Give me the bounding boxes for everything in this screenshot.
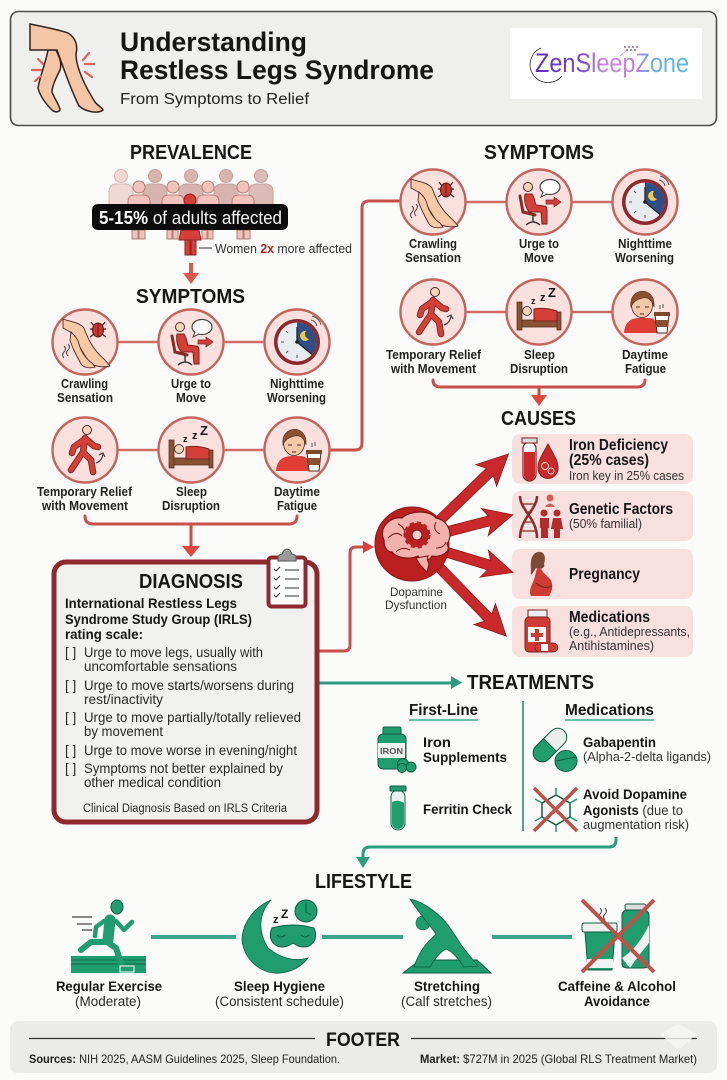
icon: pregnant woman	[530, 552, 552, 596]
icon: sleep disruption: Z	[200, 423, 208, 438]
label: urge to move	[171, 377, 211, 405]
label: crawling sensation	[57, 377, 113, 405]
icon: crawling sensation	[52, 310, 118, 374]
header panel	[10, 12, 716, 126]
label: daytime fatigue	[274, 485, 320, 513]
label: daytime fatigue: Daytime	[622, 348, 668, 362]
note: clinical diagnosis: Clinical Diagnosis Based on IRLS Criteria	[83, 803, 288, 815]
label: sleep disruption: Sleep	[524, 348, 555, 362]
label: temporary relief: with Movement	[41, 499, 129, 513]
label: crawling sensation: Sensation	[405, 251, 461, 265]
card: medications: Medications	[569, 609, 650, 626]
subtitle: From Symptoms to Relief	[120, 91, 310, 108]
label: stretching	[401, 978, 492, 1009]
icon: stretching	[403, 899, 491, 973]
heading: causes: CAUSES	[501, 408, 576, 430]
icon: urge to move	[158, 310, 224, 374]
heading: symptoms: SYMPTOMS	[484, 142, 594, 164]
label: sleep hygiene: (Consistent schedule)	[215, 994, 344, 1009]
label: dopamine dysfunction	[385, 585, 447, 612]
label: caffeine and alcohol avoidance	[558, 978, 676, 1009]
text: ferritin check: Ferritin Check	[423, 801, 512, 817]
icon: nighttime worsening	[264, 310, 330, 374]
label: crawling sensation: Crawling	[409, 237, 457, 251]
icon: crawling sensation	[400, 170, 466, 234]
connector: diagnosis to dopamine	[319, 541, 374, 651]
text: iron supplements: Supplements	[423, 749, 507, 765]
text: avoid dopamine agonists: Avoid Dopamine	[583, 786, 687, 802]
heading: lifestyle: LIFESTYLE	[315, 871, 412, 893]
label: sleep disruption: Sleep	[176, 485, 207, 499]
label: temporary relief: with Movement	[390, 362, 477, 376]
icon: gabapentin capsule	[529, 724, 577, 772]
icon: sleep disruption: z	[183, 434, 188, 444]
label: regular exercise	[56, 978, 162, 1009]
icon: daytime fatigue	[264, 418, 330, 482]
panel: diagnosis	[54, 549, 317, 822]
card: medications	[512, 606, 693, 657]
card: pregnancy: Pregnancy	[569, 566, 640, 583]
logo	[510, 28, 702, 99]
icon: sleep hygiene moon	[242, 900, 317, 973]
heading: treatments: TREATMENTS	[467, 672, 594, 694]
label: nighttime worsening: Nighttime	[618, 237, 672, 251]
card: iron deficiency: Iron key in 25% cases	[569, 469, 684, 483]
label: urge to move: Urge to	[171, 377, 211, 391]
icon: daytime fatigue	[612, 280, 678, 344]
label: temporary relief	[37, 485, 133, 513]
icon: sleep disruption	[158, 418, 224, 482]
women callout: Women 2x more affected	[215, 242, 352, 256]
label: dopamine dysfunction: Dopamine	[390, 585, 443, 599]
icon: brain dopamine	[375, 507, 450, 581]
section: symptoms right	[386, 142, 678, 406]
label: crawling sensation: Sensation	[57, 391, 113, 405]
text: gabapentin	[583, 734, 711, 764]
label: temporary relief: Temporary Relief	[386, 348, 482, 362]
text: IRLS intro	[65, 595, 252, 642]
label: daytime fatigue: Fatigue	[625, 362, 666, 376]
panel: footer	[10, 1021, 717, 1073]
logo: ZenSleepZone	[535, 48, 689, 78]
icon: sleep hygiene moon: z	[273, 914, 279, 926]
label: regular exercise: (Moderate)	[75, 994, 141, 1009]
icon: bottle and pill	[525, 610, 558, 652]
label: caffeine and alcohol avoidance: Caffeine & Alcohol	[558, 978, 676, 994]
label: caffeine and alcohol avoidance: Avoidance	[584, 993, 650, 1009]
checklist: [ ]	[65, 743, 76, 758]
connector: treatments to lifestyle	[356, 837, 616, 868]
icon: runner	[71, 900, 146, 973]
label: nighttime worsening: Worsening	[615, 251, 674, 265]
bracket arrow: to causes	[433, 380, 645, 406]
text: sources: Sources: NIH 2025, AASM Guidelines 2025, Sleep Foundation.	[29, 1052, 340, 1066]
connector: diagnosis to treatments	[319, 676, 462, 689]
text: avoid dopamine agonists	[583, 786, 689, 832]
checklist: other medical condition	[84, 775, 221, 790]
checklist: uncomfortable sensations	[84, 659, 237, 674]
section: prevalence	[92, 142, 352, 284]
card: medications: Antihistamines)	[569, 639, 654, 653]
title	[120, 27, 434, 85]
label: sleep hygiene: Sleep Hygiene	[234, 978, 325, 994]
card: iron deficiency: (25% cases)	[569, 452, 649, 469]
checklist: [ ]	[65, 645, 76, 660]
checklist	[65, 645, 301, 790]
label: sleep hygiene	[215, 978, 344, 1009]
icon: test tube and drop	[522, 438, 558, 481]
text: iron supplements	[423, 734, 507, 765]
checklist: Urge to move legs, usually with	[84, 645, 263, 660]
label: temporary relief: Temporary Relief	[37, 485, 133, 499]
card: genetic factors: Genetic Factors	[569, 501, 673, 518]
icon: iron bottle: IRON	[380, 746, 403, 756]
bracket arrow: to diagnosis	[85, 516, 297, 557]
label: crawling sensation: Crawling	[61, 377, 108, 391]
title: Restless Legs Syndrome	[120, 55, 434, 85]
checklist: by movement	[84, 724, 163, 739]
text: IRLS intro: International Restless Legs	[65, 595, 237, 611]
icon: sleep disruption: z	[192, 430, 198, 442]
card: medications: (e.g., Antidepressants,	[569, 625, 690, 639]
stat pill: 5-15% of adults affected	[99, 208, 282, 228]
icon: sleep disruption	[506, 280, 572, 344]
checklist: rest/inactivity	[84, 692, 163, 707]
checklist: Urge to move partially/totally relieved	[84, 710, 301, 725]
connector: left symptoms to right symptoms	[330, 201, 400, 450]
label: urge to move: Move	[176, 391, 206, 405]
text: avoid dopamine agonists: Agonists (due to	[583, 802, 683, 818]
icon: sleep disruption: z	[540, 292, 546, 304]
text: market: Market: $727M in 2025 (Global RLS Treatment Market)	[420, 1052, 697, 1066]
label: daytime fatigue: Fatigue	[277, 499, 317, 513]
checklist: Urge to move worse in evening/night	[84, 743, 297, 758]
subheading: first-line: First-Line	[409, 702, 478, 719]
icon: sleep hygiene moon: Z	[281, 907, 288, 921]
section: symptoms left	[37, 286, 330, 557]
icon: iron bottle	[378, 727, 416, 772]
arrows: dopamine to causes	[427, 443, 519, 647]
label: nighttime worsening	[615, 237, 674, 265]
label: sleep disruption	[510, 348, 568, 376]
title: Understanding	[120, 27, 307, 57]
icon: temporary relief	[400, 280, 466, 344]
label: daytime fatigue	[622, 348, 668, 376]
label: nighttime worsening: Nighttime	[270, 377, 324, 391]
icon: dopamine agonist crossed	[534, 788, 577, 832]
heading: symptoms: SYMPTOMS	[136, 286, 245, 308]
label: crawling sensation	[405, 237, 461, 265]
icon: dna and family	[520, 494, 563, 538]
section: lifestyle	[56, 871, 676, 1009]
text: gabapentin: Gabapentin	[583, 734, 656, 750]
icon: clipboard	[268, 549, 306, 606]
label: urge to move: Urge to	[519, 237, 559, 251]
label: sleep disruption: Disruption	[510, 362, 568, 376]
icon: nighttime worsening	[612, 170, 678, 234]
icon: sleep disruption: Z	[548, 285, 556, 300]
label: nighttime worsening: Worsening	[267, 391, 326, 405]
card: genetic factors: (50% familial)	[569, 517, 642, 531]
label: dopamine dysfunction: Dysfunction	[385, 598, 447, 612]
card: pregnancy	[512, 549, 693, 599]
people crowd	[109, 170, 273, 255]
icon: caffeine and alcohol crossed	[582, 900, 654, 972]
checklist: Symptoms not better explained by	[84, 761, 283, 776]
icon: ferritin tube	[390, 786, 406, 830]
icon: urge to move	[506, 170, 572, 234]
label: temporary relief	[386, 348, 482, 376]
checklist: Urge to move starts/worsens during	[84, 678, 294, 693]
card: iron deficiency: Iron Deficiency	[569, 437, 668, 454]
icon: sleep disruption: z	[531, 296, 536, 306]
arrow: down	[183, 263, 199, 284]
label: urge to move: Move	[524, 251, 554, 265]
label: daytime fatigue: Daytime	[274, 485, 320, 499]
text: gabapentin: (Alpha-2-delta ligands)	[583, 750, 711, 764]
label: stretching: Stretching	[414, 978, 480, 994]
heading: footer: FOOTER	[326, 1030, 400, 1051]
heading: diagnosis: DIAGNOSIS	[139, 571, 243, 593]
checklist: [ ]	[65, 761, 76, 776]
text: IRLS intro: Syndrome Study Group (IRLS)	[65, 611, 252, 627]
icon: restless legs	[30, 24, 103, 112]
section: treatments	[356, 672, 711, 868]
card: iron deficiency	[512, 434, 693, 484]
text: avoid dopamine agonists: augmentation risk)	[583, 818, 689, 832]
icon: temporary relief	[52, 418, 118, 482]
checklist: [ ]	[65, 678, 76, 693]
label: stretching: (Calf stretches)	[401, 994, 492, 1009]
label: sleep disruption: Disruption	[162, 499, 220, 513]
heading: prevalence: PREVALENCE	[130, 142, 252, 164]
card: genetic factors	[512, 491, 693, 541]
text: iron supplements: Iron	[423, 734, 451, 750]
label: urge to move	[519, 237, 559, 265]
label: regular exercise: Regular Exercise	[56, 978, 162, 994]
label: nighttime worsening	[267, 377, 326, 405]
section: causes	[375, 408, 693, 657]
text: IRLS intro: rating scale:	[65, 626, 143, 642]
checklist: [ ]	[65, 710, 76, 725]
subheading: medications: Medications	[565, 702, 654, 719]
label: sleep disruption	[162, 485, 220, 513]
